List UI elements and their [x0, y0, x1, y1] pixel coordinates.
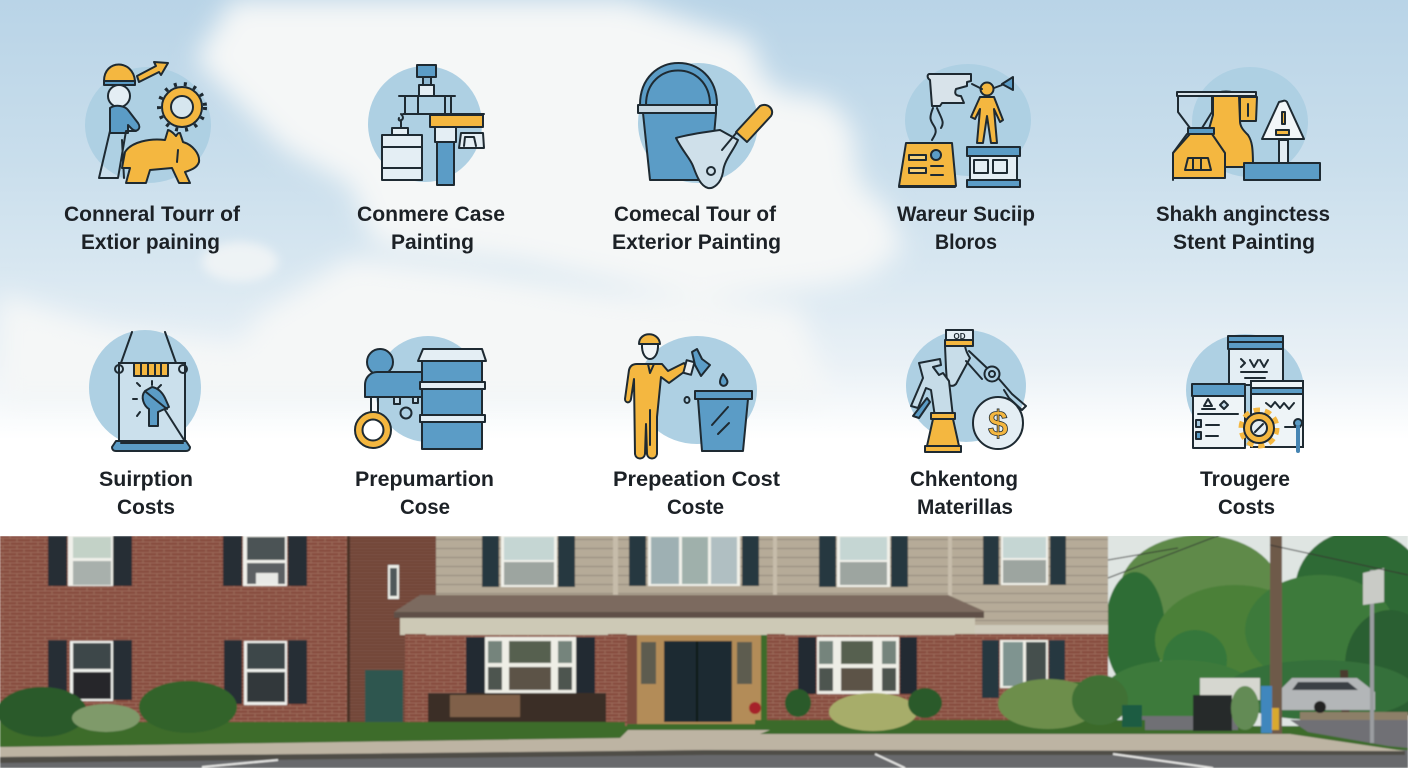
background trees and sky — [1105, 530, 1408, 730]
label: first row, column one: Extior paining — [81, 231, 220, 254]
label: first row, column three — [612, 203, 781, 254]
right-hand road — [1138, 716, 1408, 748]
label: first row, column five: Shakh anginctess — [1156, 203, 1330, 226]
icon: blue barrel and machine — [355, 336, 486, 449]
porch windows — [466, 637, 1065, 698]
parking lines — [202, 754, 1213, 768]
label: first row, column two: Conmere Case — [357, 203, 505, 226]
label: first row, column four — [897, 203, 1035, 254]
label: second row, column one: Costs — [117, 496, 175, 519]
icon: spray gun with cost coin: $ — [988, 403, 1008, 444]
siding upper floor — [436, 536, 1108, 598]
label: second row, column three: Prepeation Cost — [613, 468, 780, 491]
label: first row, column two: Painting — [391, 231, 474, 254]
label: first row, column one: Conneral Tourr of — [64, 203, 241, 226]
sidewalk and curb — [0, 730, 1405, 757]
photo: apartment buildings and street — [0, 528, 1408, 768]
label: first row, column three: Exterior Painting — [612, 231, 781, 254]
label: second row, column five — [1200, 468, 1290, 519]
label: first row, column one — [64, 203, 241, 254]
label: second row, column three: Coste — [667, 496, 724, 519]
icon: paint bucket and scraper — [638, 63, 772, 188]
label: second row, column two: Cose — [400, 496, 450, 519]
icon: spray gun with cost coin: OD — [954, 332, 966, 341]
icon: spray gun with cost coin — [906, 330, 1026, 452]
label: first row, column five: Stent Painting — [1173, 231, 1315, 254]
icon: funnel, bottle and warning sign — [1173, 67, 1320, 180]
label: second row, column four: Chkentong — [910, 468, 1018, 491]
label: first row, column four: Bloros — [935, 231, 997, 254]
icon: spray gun, painter and equipment — [899, 64, 1031, 187]
porch beam and pillars — [400, 618, 975, 635]
sky background with clouds — [0, 0, 1408, 536]
porch brick and door — [426, 634, 609, 723]
icon: documents with gear — [1186, 334, 1304, 451]
icon: worker with gear and rabbit — [85, 62, 211, 183]
shutters and windows of brick building — [48, 536, 399, 705]
label: second row, column one: Suirption — [99, 468, 193, 491]
street furniture — [1108, 528, 1408, 743]
road — [0, 750, 1408, 768]
label: first row, column five — [1156, 203, 1330, 254]
label: second row, column two: Prepumartion — [355, 468, 494, 491]
label: second row, column five: Trougere — [1200, 468, 1290, 491]
label: second row, column four: Materillas — [917, 496, 1013, 519]
label: first row, column four: Wareur Suciip — [897, 203, 1035, 226]
label: second row, column one — [99, 468, 193, 519]
label: second row, column five: Costs — [1218, 496, 1275, 519]
shrubs, flowers and lawn strip — [0, 674, 1146, 737]
porch railing and left side fence — [428, 693, 606, 722]
icon: hanging bag with shovel — [89, 330, 201, 451]
label: first row, column three: Comecal Tour of — [614, 203, 777, 226]
icon: painter with sprayer and pail — [625, 334, 757, 458]
icon: hoist and paint pail — [368, 65, 484, 185]
label: second row, column two — [355, 468, 494, 519]
label: second row, column four — [910, 468, 1018, 519]
label: second row, column three — [613, 468, 780, 519]
brick building left — [0, 536, 348, 732]
upper floor windows — [482, 536, 1066, 587]
porch roof — [395, 594, 984, 612]
label: first row, column two — [357, 203, 505, 254]
parked van — [1280, 678, 1375, 710]
